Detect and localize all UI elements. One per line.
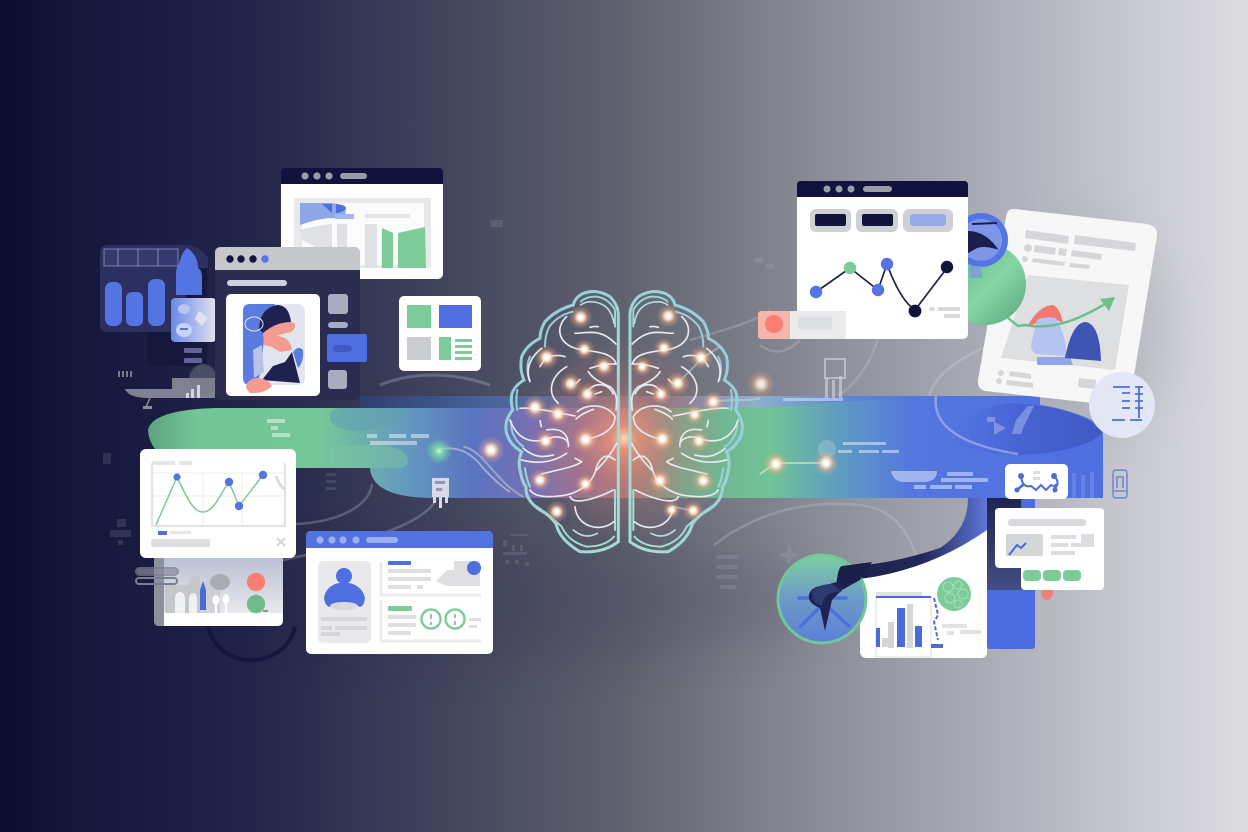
soft haze under the band — [240, 220, 1170, 660]
paper card: bar chart — [860, 530, 987, 658]
card: green and blue tiles — [399, 296, 481, 371]
green texture disc — [937, 577, 971, 611]
monitor backdrop — [147, 268, 207, 366]
portrait card — [226, 294, 320, 396]
title bar — [281, 168, 443, 184]
card: line chart with nodes — [140, 449, 296, 558]
dark ellipse top right — [940, 403, 1103, 455]
bars — [105, 279, 165, 326]
small chips on band left — [432, 478, 449, 508]
dark arc behind cards — [208, 626, 295, 660]
side tiles — [327, 294, 367, 389]
card: photo with traffic lights — [136, 556, 283, 626]
card: tilted product report — [978, 209, 1157, 406]
picture box — [1001, 275, 1129, 370]
panel: tail and blue backing — [826, 472, 1094, 649]
card: chart with green buttons — [995, 508, 1104, 600]
title bar — [797, 181, 968, 197]
outer nodes and links — [426, 370, 839, 492]
bullet shape — [176, 248, 202, 295]
line chart — [810, 258, 953, 317]
small pills — [184, 348, 202, 363]
chart area — [294, 198, 431, 268]
text rows — [1022, 230, 1136, 269]
icon: circular list badge — [1089, 372, 1155, 438]
core glow — [524, 338, 724, 538]
panel: bar chart tablet — [100, 245, 216, 366]
right hemisphere — [630, 291, 743, 552]
upper content — [381, 561, 481, 595]
left hemisphere — [506, 291, 618, 552]
title bar — [306, 531, 493, 548]
main band — [148, 396, 1103, 498]
profile sidebar — [318, 561, 371, 643]
tag: peach status chip — [758, 311, 846, 339]
translucent control tile — [171, 298, 216, 342]
faint connector curves — [283, 310, 990, 560]
icon: side chip outline — [1113, 470, 1127, 498]
brain — [463, 291, 760, 552]
small decorative marks — [103, 194, 1046, 589]
window: top chart — [281, 168, 443, 279]
blue dial disc — [954, 213, 1008, 278]
bars — [876, 592, 943, 657]
central flow band — [148, 396, 1103, 498]
tab buttons — [810, 209, 953, 232]
card: zigzag chip — [1005, 464, 1068, 499]
window: right line chart — [797, 181, 968, 339]
window: dark profile — [215, 247, 367, 400]
card: profile chart window — [306, 531, 493, 654]
lower content with gauges — [381, 600, 481, 641]
trend arrow — [1008, 297, 1115, 326]
table header — [104, 249, 178, 266]
chip on right top of band — [783, 359, 845, 401]
plot frame — [152, 461, 285, 526]
band dash marks — [267, 419, 988, 489]
icon: green ring disc with navy pin — [778, 555, 872, 643]
band lower tone — [330, 445, 408, 468]
title bar — [215, 247, 360, 270]
neural nodes — [522, 304, 725, 523]
green sphere — [944, 243, 1026, 325]
monitor stand — [118, 364, 217, 409]
band highlight lines behind nodes — [463, 347, 760, 511]
upper band strip — [360, 396, 1040, 420]
